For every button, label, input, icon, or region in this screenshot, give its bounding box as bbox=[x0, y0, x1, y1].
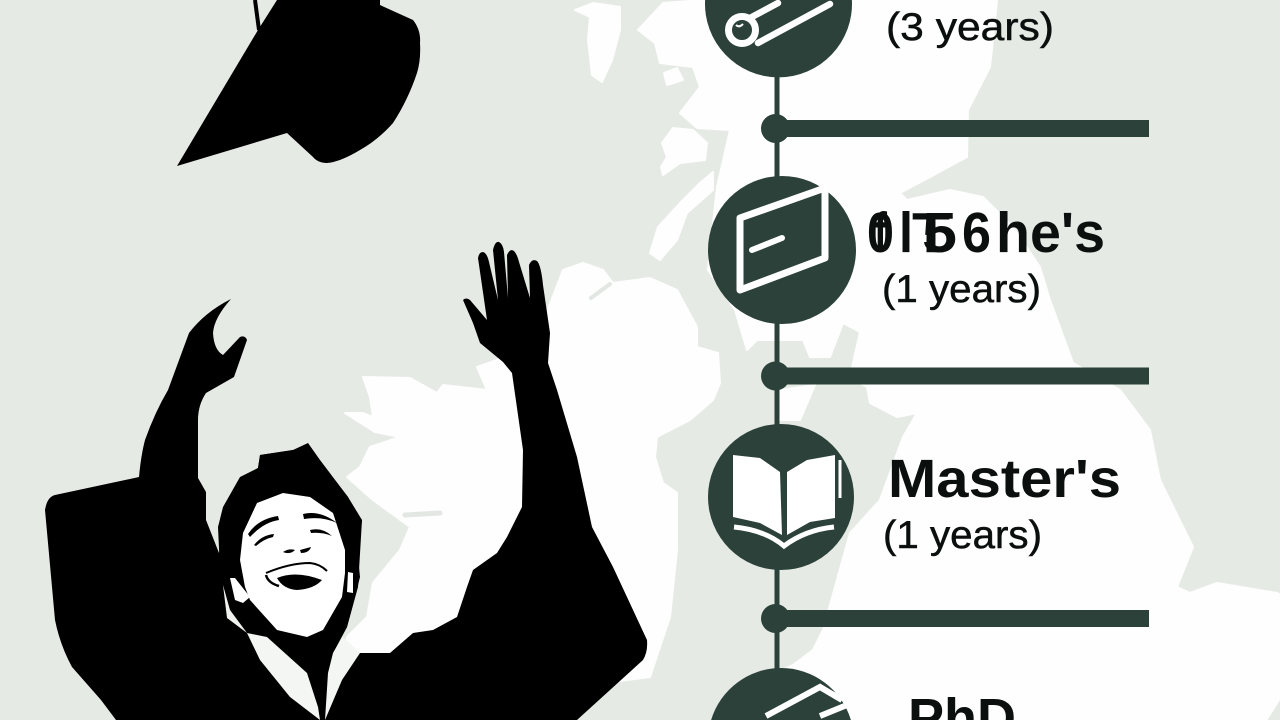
step 3: master's bbox=[708, 424, 1121, 570]
lip curl bbox=[266, 575, 279, 586]
heading: Master's bbox=[888, 449, 1121, 509]
right eyebrow bbox=[303, 513, 337, 523]
duration label: (1 years) bbox=[883, 514, 1042, 557]
mouth bbox=[277, 574, 322, 590]
heading: 6 bbox=[962, 201, 991, 265]
right ear bbox=[347, 572, 353, 593]
icon: scroll bbox=[705, 0, 852, 77]
map: Ireland bbox=[345, 263, 720, 700]
left lapel bbox=[247, 633, 320, 720]
collar sliver bbox=[223, 585, 247, 633]
graduation cap silhouette bbox=[177, 0, 420, 166]
right lapel bbox=[325, 637, 360, 720]
step 2: garbled heading bbox=[708, 176, 1105, 324]
timeline vertical line bbox=[774, 0, 780, 720]
cap body bbox=[177, 0, 420, 166]
map: small island bbox=[664, 68, 683, 85]
divider 1 bbox=[761, 114, 1149, 143]
left eye bbox=[254, 534, 274, 546]
upper lip line bbox=[266, 563, 327, 573]
heading: 5 bbox=[922, 201, 957, 265]
duration label: (3 years) bbox=[886, 6, 1054, 49]
nose bbox=[283, 547, 311, 553]
cap tassel bbox=[255, 0, 259, 30]
icon: open book bbox=[708, 424, 854, 570]
heading: l bbox=[899, 201, 913, 265]
map: inlet stroke north bbox=[591, 284, 610, 298]
step 1: bachelor's degree 3 years bbox=[705, 0, 1054, 77]
heading: 0 bbox=[867, 201, 894, 265]
icon: certificate bbox=[708, 176, 856, 324]
heading: he's bbox=[996, 201, 1105, 265]
graduate figure bbox=[45, 242, 647, 720]
icon: scroll bbox=[711, 668, 851, 720]
heading: f bbox=[874, 201, 888, 265]
map: Shetland island bbox=[575, 3, 620, 82]
face bbox=[240, 493, 345, 637]
map: Great Britain bbox=[638, 1, 1279, 719]
left eyebrow bbox=[248, 516, 279, 537]
heading bbox=[867, 201, 1105, 265]
right eye bbox=[310, 529, 332, 536]
background map: British Isles bbox=[345, 1, 1279, 719]
step 4: PhD bbox=[711, 668, 1016, 720]
timeline bbox=[705, 0, 1149, 720]
divider 3 bbox=[761, 604, 1149, 633]
map: inlet stroke west bbox=[405, 513, 440, 515]
heading: T bbox=[912, 201, 950, 265]
left ear bbox=[230, 578, 250, 603]
map: sea lochs and shading bbox=[405, 284, 610, 515]
map: Skye island bbox=[661, 128, 707, 175]
map: small white patch below first divider bbox=[780, 385, 815, 420]
divider 2 bbox=[761, 362, 1149, 390]
duration label: (1 years) bbox=[882, 268, 1041, 311]
hair bbox=[218, 443, 362, 660]
gown and raised arms bbox=[45, 242, 647, 720]
map: long island bbox=[650, 172, 713, 260]
